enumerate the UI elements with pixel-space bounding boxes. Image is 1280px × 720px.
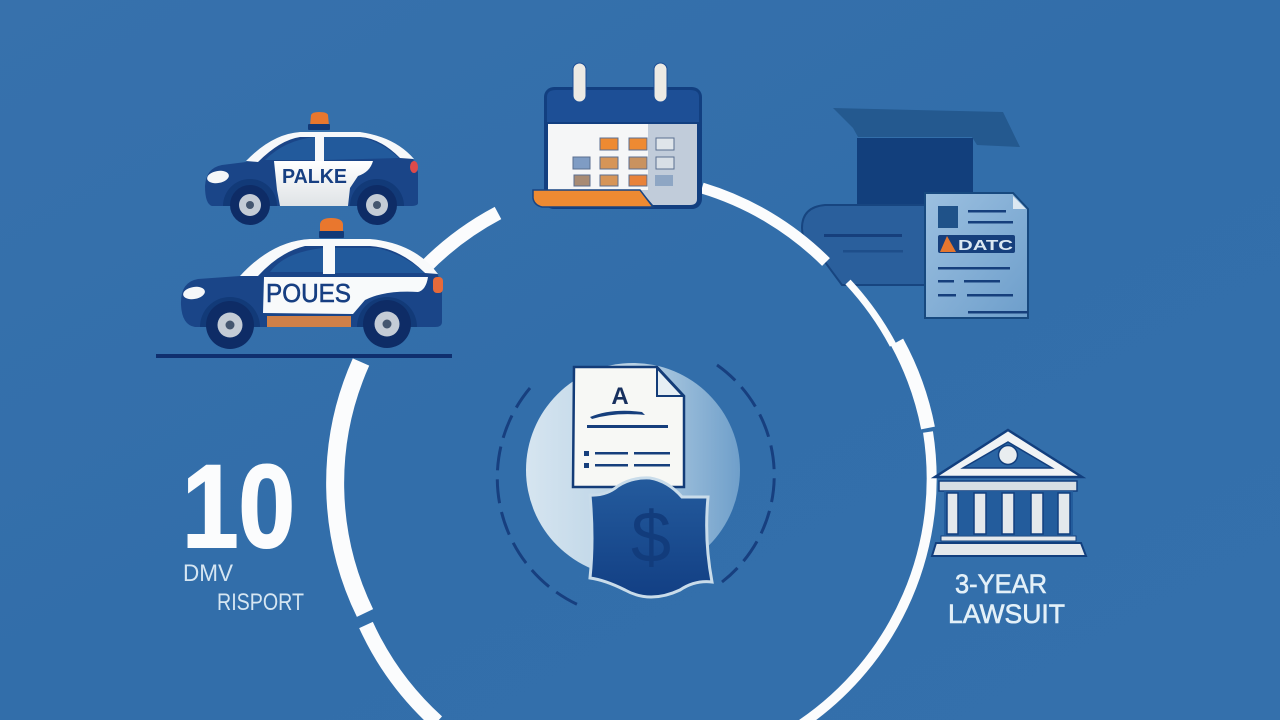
report sheet [925,193,1028,318]
label: 3-year lawsuit [948,569,1065,629]
windows [265,137,315,160]
ring segment: right shoulder [848,282,893,345]
entablature [939,481,1077,491]
emblem disc [526,363,740,577]
sheet thumbnail [938,206,958,228]
roof light [320,218,343,232]
day cells [573,138,674,186]
label line 1: DMV [183,560,233,587]
tail light [410,161,418,173]
document [573,367,684,487]
sheet text lines [938,267,1028,314]
wheels [200,297,260,327]
orange stripe [267,316,351,327]
shield with dollar: $ [631,498,671,578]
roof light [308,112,329,129]
ring segment: left [335,362,365,613]
car body [205,132,418,206]
shield with dollar [590,478,712,597]
calendar frame [544,87,702,209]
document lines [584,411,670,468]
label line 1: 3-YEAR [955,569,1047,599]
car body [181,239,442,327]
ring segment: lower right [802,432,932,720]
icon: police car top [205,112,418,225]
label line 2: LAWSUIT [948,599,1065,629]
ring segment: upper left [405,213,498,290]
ring segment: right upper [897,342,928,428]
label line 2: RISPORT [217,589,304,616]
door lettering: POUES [266,278,351,308]
center emblem [497,363,774,607]
ring segment: lower left [366,625,437,720]
calendar rings [573,63,586,102]
base [941,536,1076,541]
printer middle [857,138,973,208]
door panel [263,277,428,314]
calendar header [547,90,699,122]
sheet banner [938,235,1015,254]
stat: 10 days: 10 [182,441,295,573]
timeline ring [335,188,932,720]
orange base [533,190,653,207]
ring segment: top right [702,188,826,262]
dashed arc right [717,365,774,582]
document letter: A [611,383,629,410]
door panel [274,161,373,206]
dashed arc left [497,388,583,607]
colonnade [944,491,1073,535]
tail light [433,277,443,293]
page shadow side [640,124,697,205]
headlight [206,169,230,185]
label: DMV report [183,560,304,616]
icon: police car bottom [181,218,443,349]
icon: calendar [533,63,702,209]
ground line [156,354,452,358]
wheels [223,179,277,206]
door lettering: PALKE [282,166,347,188]
headlight [182,285,206,301]
windows [270,248,323,272]
icon: printer and report [802,108,1028,318]
printer body [802,205,925,285]
icon: courthouse [932,430,1086,556]
calendar page [548,124,648,192]
printer top flap [833,108,1020,147]
sheet banner: DATC [958,237,1013,254]
pediment [935,430,1082,477]
